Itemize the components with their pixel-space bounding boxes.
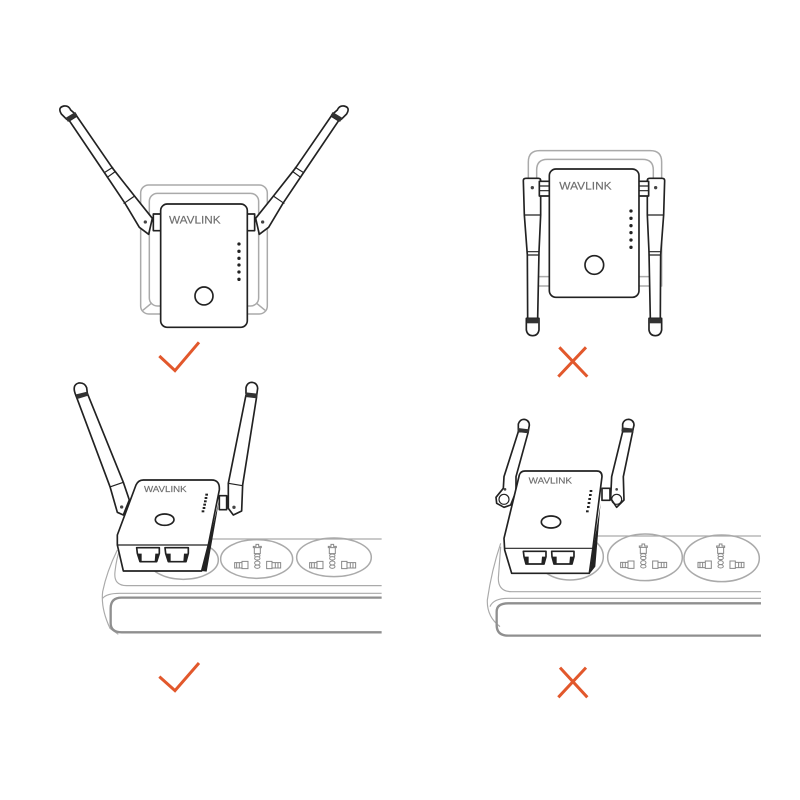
panel: correct wall placement, antennas up — [60, 106, 348, 371]
WPS button — [195, 287, 213, 305]
ethernet ports — [523, 551, 574, 564]
status LEDs — [629, 209, 633, 249]
socket — [297, 538, 371, 577]
cross mark — [558, 668, 587, 697]
socket — [148, 541, 218, 579]
device body — [153, 204, 255, 327]
left antenna — [74, 383, 129, 515]
left antenna — [523, 178, 541, 336]
status LEDs — [586, 490, 592, 512]
WPS button — [585, 256, 604, 274]
device body — [504, 471, 602, 573]
check mark — [159, 663, 199, 691]
cross mark — [558, 347, 587, 377]
check mark — [159, 342, 199, 371]
WPS button — [155, 514, 174, 525]
socket — [537, 533, 603, 580]
wall plate — [141, 185, 267, 314]
power strip — [487, 533, 761, 636]
device body — [539, 169, 649, 297]
device body — [117, 480, 219, 572]
left antenna — [60, 106, 152, 234]
right antenna — [256, 106, 348, 234]
logo: WAVLINK — [559, 181, 612, 193]
socket — [684, 535, 759, 582]
WPS button — [541, 516, 561, 528]
ethernet ports — [137, 548, 188, 562]
right antenna — [219, 382, 258, 515]
panel: wrong power strip placement — [487, 419, 761, 697]
panel: correct power strip placement — [74, 382, 382, 691]
wall plate — [528, 151, 662, 286]
socket — [608, 534, 682, 581]
right antenna — [602, 419, 634, 507]
logo: WAVLINK — [529, 475, 572, 485]
socket — [221, 540, 293, 578]
status LEDs — [202, 494, 208, 512]
panel: wrong wall placement, antennas down — [523, 151, 665, 377]
status LEDs — [237, 242, 241, 281]
left antenna — [496, 419, 529, 507]
power strip — [102, 538, 382, 634]
right antenna — [647, 178, 665, 336]
logo: WAVLINK — [169, 214, 221, 226]
logo: WAVLINK — [144, 484, 187, 494]
